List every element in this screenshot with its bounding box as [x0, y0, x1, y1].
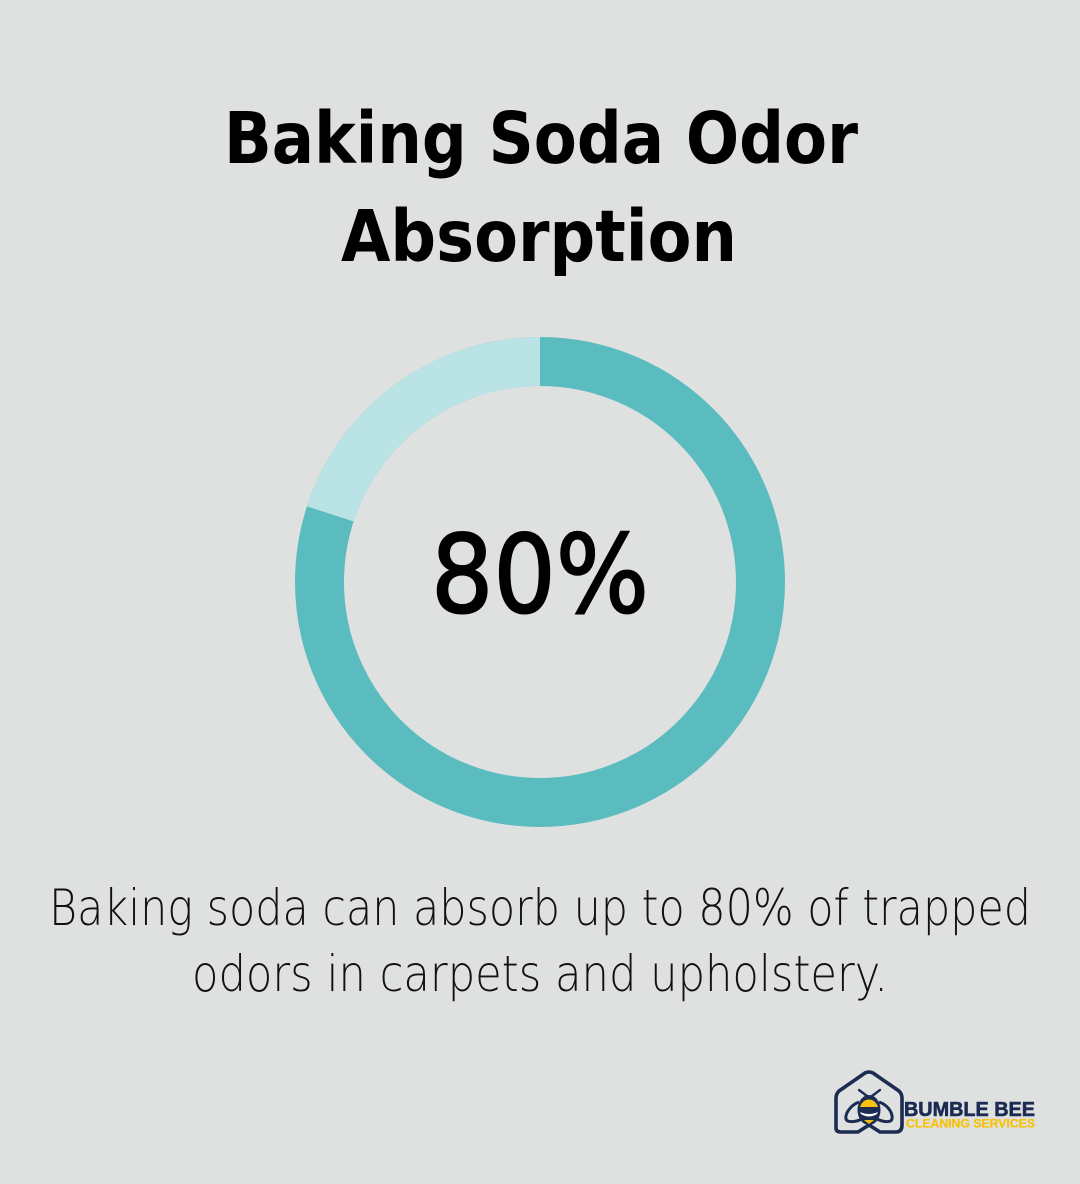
icon: house outline — [836, 1072, 902, 1132]
icon: bee — [846, 1090, 892, 1125]
remaining segment: 20% — [330, 362, 540, 514]
logo wordmark: BUMBLE BEE — [904, 1099, 1035, 1121]
title: Absorption — [341, 195, 737, 278]
title — [224, 97, 858, 278]
center value: 80% — [431, 513, 649, 638]
logo tagline: CLEANING SERVICES — [906, 1116, 1035, 1130]
donut chart: 80% — [320, 362, 760, 802]
title: Baking Soda Odor — [224, 97, 858, 180]
logo: Bumble Bee Cleaning Services — [836, 1072, 1035, 1132]
full ring segment: 80% — [320, 362, 760, 802]
description text — [49, 879, 1031, 1003]
description text: odors in carpets and upholstery. — [192, 945, 888, 1003]
